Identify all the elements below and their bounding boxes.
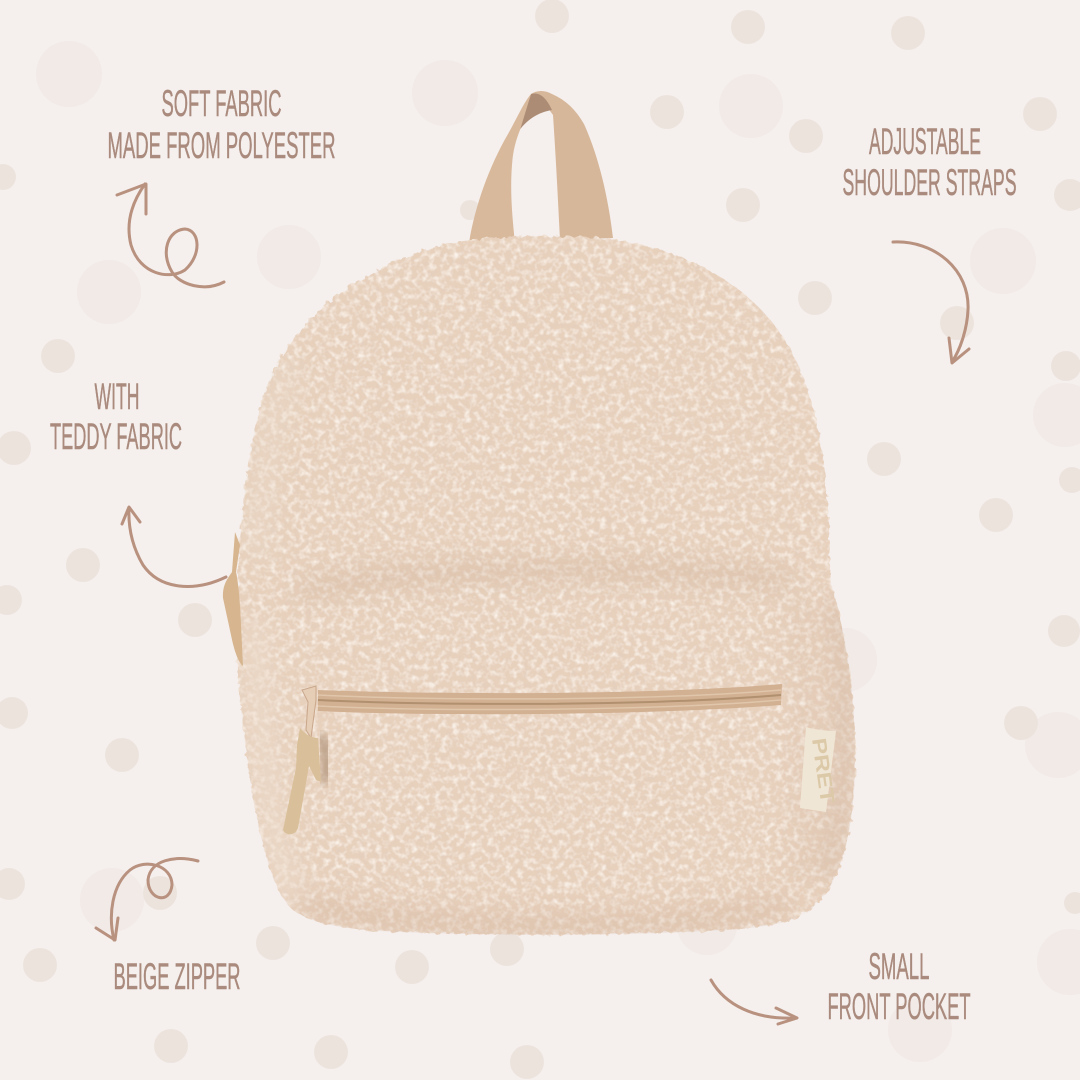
label: soft fabric: MADE FROM POLYESTER: [108, 125, 336, 166]
arrow: shoulder straps: [893, 242, 969, 363]
brand tag: PRET: [807, 737, 838, 805]
label: with teddy fabric: [50, 376, 182, 457]
label: small front pocket: SMALL: [868, 946, 930, 987]
label: small front pocket: [828, 946, 970, 1027]
arrow: beige zipper: [96, 859, 198, 940]
arrow: front pocket: [711, 980, 797, 1024]
label: soft fabric: [108, 83, 336, 166]
zipper pull: [283, 686, 327, 834]
label: adjustable shoulder straps: [842, 121, 1016, 203]
side zipper pull: [223, 532, 243, 666]
backpack: [223, 91, 855, 935]
brand tag: [800, 727, 838, 812]
arrow: soft fabric: [117, 184, 224, 287]
text: BEIGE ZIPPER: [114, 956, 240, 997]
arrow: teddy fabric: [122, 507, 226, 586]
label: soft fabric: SOFT FABRIC: [162, 83, 282, 124]
pocket zipper: [318, 684, 782, 714]
body shading: [248, 532, 855, 935]
carry handle: [469, 91, 613, 243]
teddy body: [236, 236, 855, 935]
label: with teddy fabric: WITH: [94, 376, 140, 417]
text: TEDDY FABRIC: [50, 416, 182, 457]
